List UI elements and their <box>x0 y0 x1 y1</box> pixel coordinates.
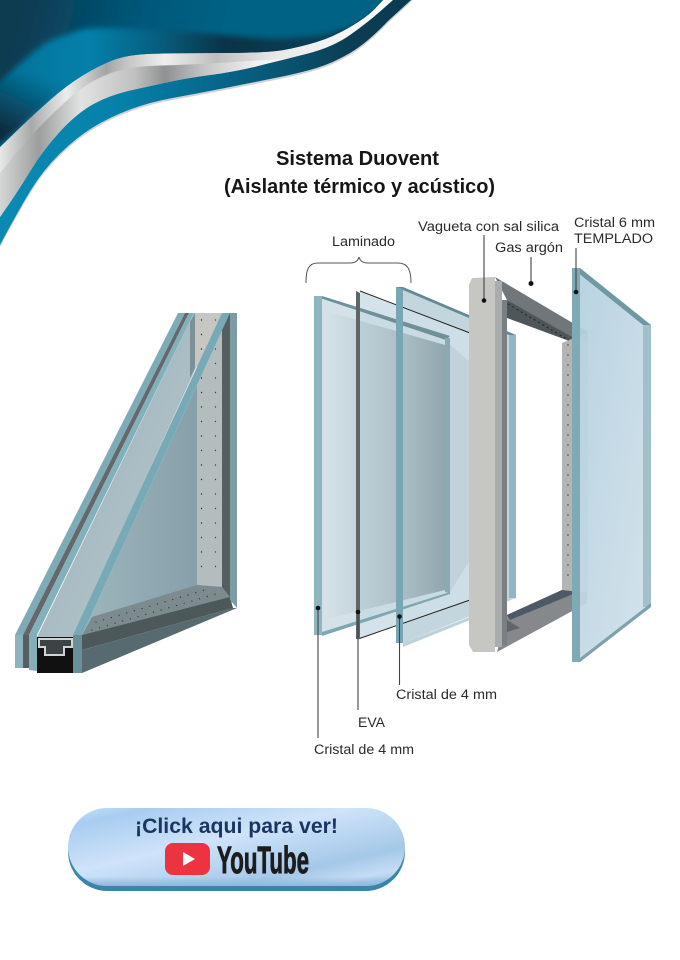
label: Cristal de 4 mm (inner): Cristal de 4 mm <box>396 687 497 703</box>
spacer frame: right bar with dots <box>562 332 588 592</box>
label: Laminado with bracket <box>306 234 411 283</box>
label: Cristal de 4 mm (outer): Cristal de 4 mm <box>314 742 414 758</box>
title: Sistema Duovent <box>276 148 439 170</box>
label: Cristal 6 mm templado <box>574 215 655 294</box>
button text: ¡Click aqui para ver! <box>135 815 338 838</box>
label: Cristal 6 mm templado: Cristal 6 mm <box>574 215 655 231</box>
EVA film <box>358 291 470 639</box>
vertical spacer with dots <box>195 313 222 587</box>
title: (Aislante térmico y acústico) <box>224 176 495 198</box>
right pane face <box>82 313 237 635</box>
spacer frame: bottom bar <box>497 590 587 652</box>
spacer profile <box>37 637 73 673</box>
header wave decoration <box>0 0 413 247</box>
spacer frame: front post <box>469 277 507 652</box>
label: Cristal 6 mm templado: TEMPLADO <box>574 231 653 247</box>
YouTube wordmark: YouTube <box>217 840 309 882</box>
bottom spacer sides <box>82 597 233 650</box>
label: Gas argón: Gas argón <box>495 240 563 256</box>
YouTube button <box>68 808 405 891</box>
icon: YouTube play logo <box>165 843 210 875</box>
bottom glass end faces <box>15 635 23 668</box>
title <box>224 148 495 198</box>
exploded glass assembly <box>314 268 651 662</box>
front laminated glass <box>314 296 470 636</box>
label: EVA <box>356 610 386 731</box>
back laminated glass <box>396 287 516 643</box>
back glass edge <box>396 287 403 643</box>
label: Vagueta con sal silica <box>418 219 559 303</box>
label: Cristal de 4 mm (inner) <box>396 614 497 703</box>
label: EVA: EVA <box>358 715 386 731</box>
glass bands <box>15 313 185 635</box>
label: Gas argón <box>495 240 563 286</box>
cross-section window corner <box>15 313 237 673</box>
EVA edge <box>356 291 360 639</box>
inner shaded area <box>322 310 445 620</box>
right glass edge <box>230 313 237 608</box>
bottom spacer surface with dots <box>82 585 230 635</box>
label: Vagueta con sal silica: Vagueta con sal silica <box>418 219 559 235</box>
spacer frame: top bar <box>495 277 588 345</box>
interior pane between glass <box>37 313 195 637</box>
right dark band <box>222 313 230 597</box>
label: Laminado with bracket: Laminado <box>332 234 395 250</box>
tempered glass <box>572 268 651 662</box>
label: Cristal de 4 mm (outer) <box>314 606 414 758</box>
